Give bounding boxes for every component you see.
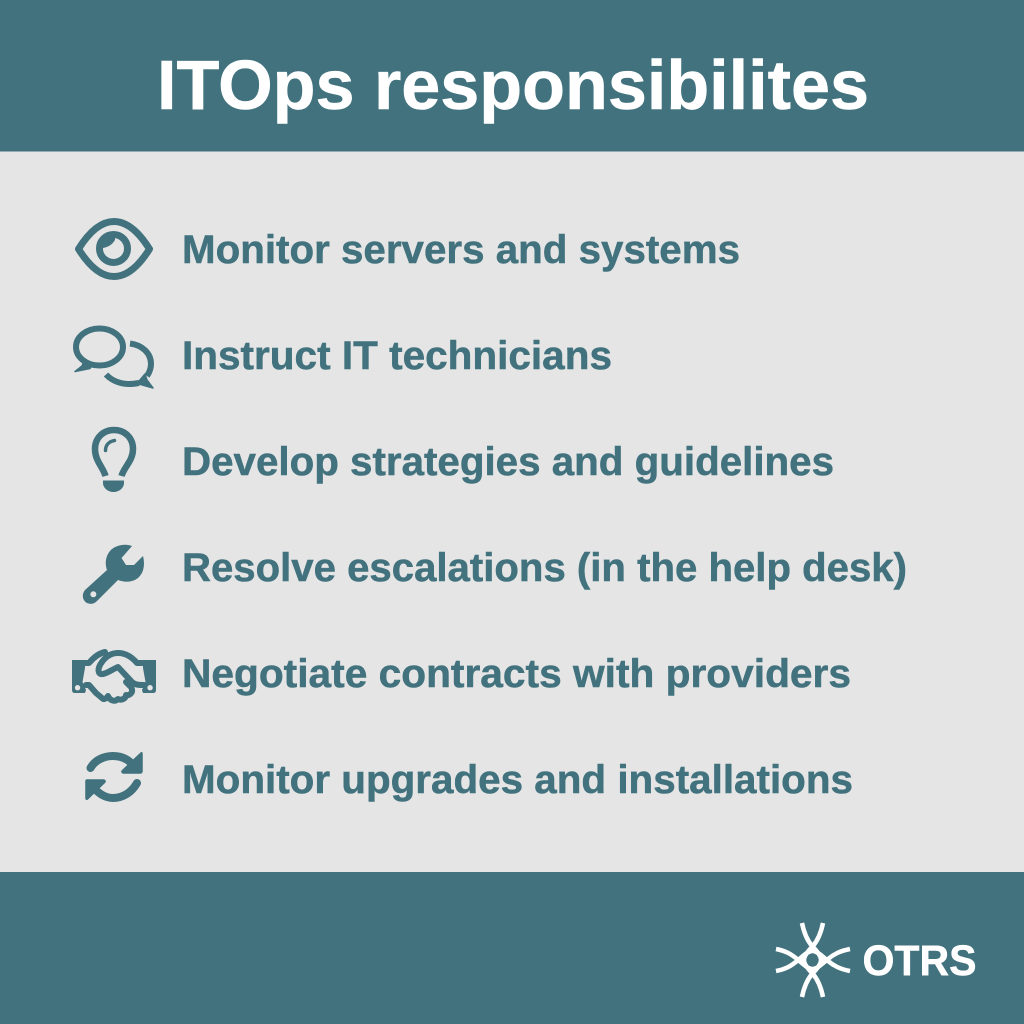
icon: refresh arrows: [86, 753, 142, 799]
icon: wrench: [83, 545, 144, 604]
text: develop: Develop strategies and guidelines: [182, 440, 834, 484]
header band: [0, 0, 1024, 152]
icon: handshake: [72, 652, 156, 701]
icon: chat bubbles: [75, 328, 153, 388]
logo text: OTRS: [862, 937, 976, 985]
text: monitor upgrades: Monitor upgrades and installations: [182, 758, 853, 802]
title: ITOps responsibilites: [157, 46, 869, 124]
logo: OTRS: [776, 923, 976, 997]
text: monitor servers: Monitor servers and systems: [182, 228, 740, 272]
text: instruct: Instruct IT technicians: [182, 334, 612, 378]
text: negotiate: Negotiate contracts with providers: [182, 652, 851, 696]
icon: eye: [78, 222, 150, 276]
icon: light bulb: [95, 430, 133, 492]
footer band: [0, 872, 1024, 1024]
text: resolve: Resolve escalations (in the help desk): [182, 546, 907, 590]
logo mark: [776, 923, 850, 997]
